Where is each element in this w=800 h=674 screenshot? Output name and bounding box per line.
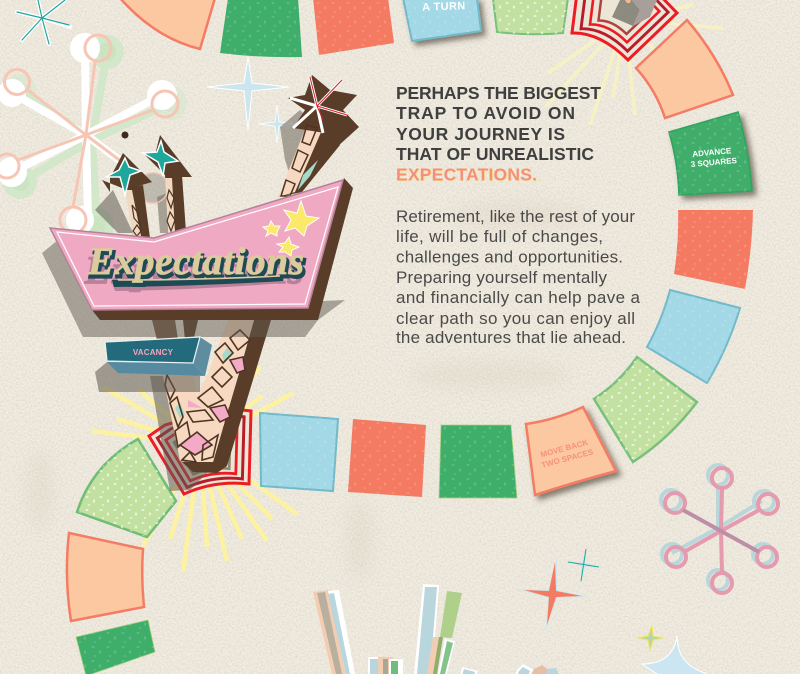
sparkle: large blue bottom: [642, 636, 705, 674]
board tile: bottom coral: [348, 419, 426, 497]
board tile: top green: [220, 0, 302, 57]
atomic starburst: large top-left: [0, 35, 183, 238]
body paragraph: the adventures that lie ahead.: [396, 328, 626, 347]
body paragraph: challenges and opportunities.: [396, 248, 623, 266]
body paragraph: Preparing yourself mentally: [396, 268, 608, 287]
sign script lettering: Expectations: [84, 249, 303, 292]
star: small teal top-left: [17, 0, 70, 44]
heading: YOUR JOURNEY IS: [396, 124, 565, 144]
pillar shadow on upper junction: [612, 0, 657, 26]
body paragraph: Retirement, like the rest of your: [396, 207, 635, 226]
board tile: advance 3 squares: ADVANCE: [692, 146, 732, 159]
board tile: move back two spaces: MOVE BACK: [540, 438, 589, 459]
board tile: lose a turn: A TURN: [422, 0, 466, 14]
board tile: top light green: [493, 0, 568, 34]
body paragraph: clear path so you can enjoy all: [396, 309, 635, 328]
board tile: bottom green: [439, 425, 517, 498]
right post top with star: [278, 75, 359, 197]
sparkle: yellow green: [637, 625, 664, 651]
sign script lettering: Expectations: [87, 240, 304, 283]
board tile: right blue: [647, 290, 740, 383]
junction tile: upper concentric red: [572, 0, 677, 60]
board tile: move back two spaces: TWO SPACES: [541, 447, 595, 470]
atomic starburst: right pink: [661, 465, 778, 593]
sparkle: blue large: [207, 57, 289, 130]
board tile: left peach: [67, 533, 144, 621]
body paragraph: [396, 207, 641, 347]
vacancy sign shadow: [95, 362, 200, 392]
board tile: lose a turn: [403, 0, 481, 41]
sign shadow: [42, 240, 345, 337]
skyline bars: [313, 584, 560, 674]
board tile: left light green: [77, 439, 176, 537]
sign stars: [263, 201, 319, 256]
vacancy sign: [105, 337, 212, 376]
board tile: top peach: [120, 0, 215, 49]
body paragraph: life, will be full of changes,: [396, 227, 603, 246]
pillar shadow lower: [150, 376, 210, 491]
body paragraph: and financially can help pave a: [396, 288, 641, 307]
vacancy sign: VACANCY: [133, 348, 174, 357]
board tile: right peach: [636, 20, 733, 118]
heading: [396, 83, 601, 185]
sign: Expectations: [50, 178, 353, 320]
sparkle: coral: [517, 556, 588, 630]
sign script lettering: Expectations: [89, 243, 306, 286]
sun rays: upper: [545, 5, 723, 125]
board tile: top coral: [313, 0, 394, 55]
board tile: advance 3 squares: 3 SQUARES: [690, 156, 738, 169]
board tile: move back two spaces: [526, 407, 616, 495]
board tile: bottom blue: [260, 413, 338, 491]
heading: TRAP TO AVOID ON: [396, 103, 575, 123]
board tile: right coral: [674, 210, 753, 289]
left posts with teal stars: [95, 132, 192, 238]
sparkle: teal small: [568, 549, 599, 581]
junction tile: lower concentric red: [149, 408, 251, 494]
heading: EXPECTATIONS.: [396, 164, 537, 184]
board tile: lower green: [76, 620, 155, 674]
sun rays: lower: [92, 367, 297, 572]
sparkle: blue small: [259, 105, 296, 143]
board tile: right light green: [594, 357, 697, 462]
heading: THAT OF UNREALISTIC: [396, 144, 594, 164]
heading: PERHAPS THE BIGGEST: [396, 83, 601, 103]
heading: EXPECTATIONS.: [397, 165, 538, 185]
board tile: advance 3 squares: [669, 112, 752, 195]
lower V post: [152, 320, 271, 473]
